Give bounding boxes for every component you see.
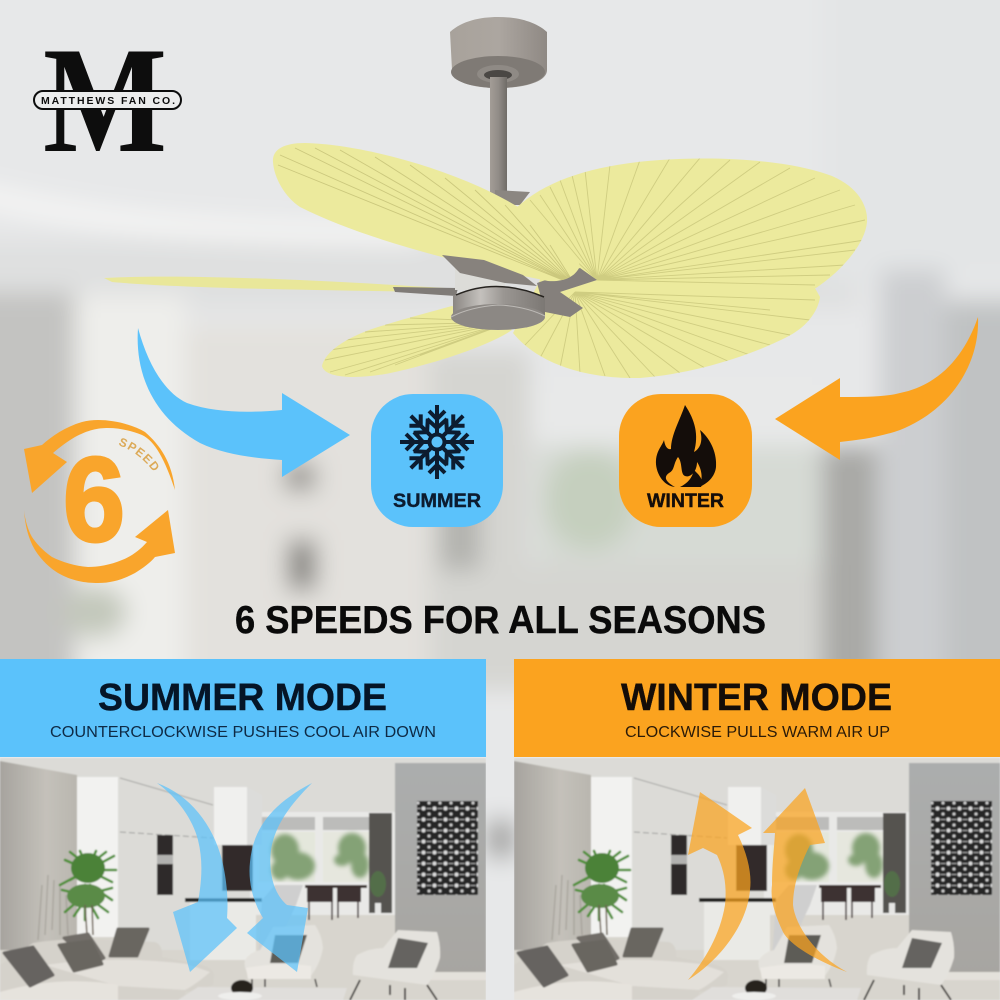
subheading: winter: CLOCKWISE PULLS WARM AIR UP [625,724,890,741]
big 6: 6 [63,433,125,567]
right orange airflow arrow [763,788,847,972]
summer airflow arrows [157,783,312,972]
left orange airflow arrow [688,792,752,980]
fan left blade arm [442,255,537,286]
blue arrow pointing to summer badge [138,328,350,477]
panel: summer mode header [0,659,486,757]
subheading: summer: COUNTERCLOCKWISE PUSHES COOL AIR DOWN [50,724,436,741]
fan blade: thin left [104,277,445,292]
left blue airflow arrow [157,783,237,972]
heading: winter mode: WINTER MODE [621,677,892,719]
upper arrow [24,420,175,493]
heading: summer mode: SUMMER MODE [98,677,387,719]
ceiling fan [104,17,867,378]
summer label: SUMMER [393,491,481,512]
icon: snowflake [400,405,474,479]
lower arrow [24,510,175,583]
icon: flame [656,405,716,487]
fan canopy and downrod [450,17,547,205]
winter label: WINTER [647,491,724,512]
logo: Matthews Fan Co.: M [43,16,167,184]
fan blade: lower left [322,306,512,377]
orange arrow pointing to winter badge [775,317,978,460]
fan blade: large upper right [516,158,867,290]
title: 6 SPEEDS FOR ALL SEASONS [235,599,766,642]
summer room scene [0,758,486,1000]
right blue airflow arrow [247,783,312,972]
fan blade: large lower right [513,280,820,378]
winter airflow arrows [688,788,847,980]
panel: winter mode header [514,659,1000,757]
icon: 6 speed dial [24,420,175,583]
fan blade: upper left [273,143,580,285]
speed label: SPEED [119,438,158,470]
summer badge [371,394,503,527]
winter badge [619,394,752,527]
logo: Matthews Fan Co.: MATTHEWS FAN CO. [41,95,175,107]
winter room scene [514,758,1000,1000]
fan motor and right blade arm [393,268,597,330]
